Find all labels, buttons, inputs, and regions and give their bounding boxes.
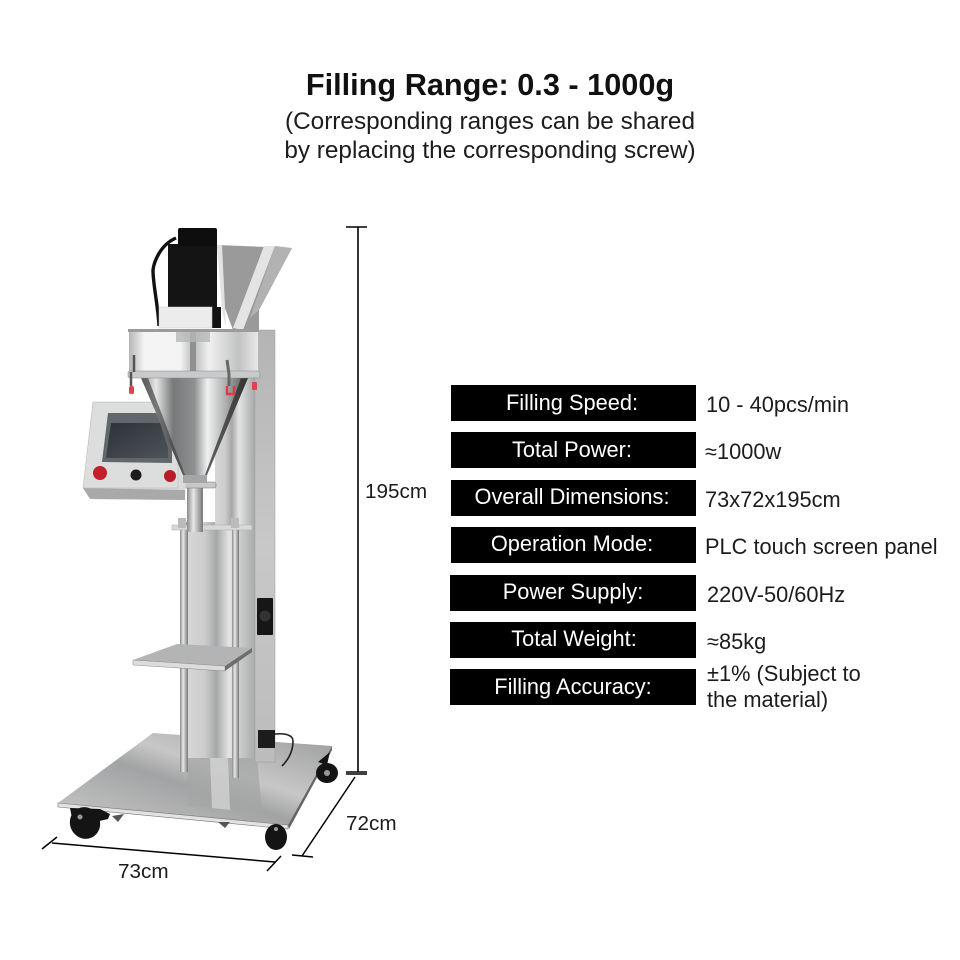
row: overall dimensions: Overall Dimensions: (474, 484, 670, 509)
subtitle: (Corresponding ranges can be shared (285, 108, 695, 135)
row: power supply: Power Supply: (503, 579, 643, 604)
row: overall dimensions: 73x72x195cm (705, 487, 841, 512)
height dimension (346, 227, 367, 774)
buttons (93, 466, 176, 482)
fan (257, 598, 273, 635)
row: power supply: 220V-50/60Hz (707, 582, 845, 607)
spec table (450, 385, 938, 712)
power plug and cable (258, 730, 293, 766)
row: total weight: ≈85kg (707, 629, 766, 654)
base plate (58, 733, 332, 829)
row: total power: ≈1000w (705, 439, 781, 464)
row: total power (451, 432, 781, 468)
discharge tube (176, 482, 216, 532)
hopper (217, 245, 292, 330)
height label: 195cm (365, 480, 427, 503)
row: filling accuracy: Filling Accuracy: (494, 674, 652, 699)
row: overall dimensions (451, 480, 841, 516)
top bracket (172, 518, 252, 530)
subtitle: by replacing the corresponding screw) (284, 137, 696, 164)
cone (141, 378, 248, 483)
control panel (83, 402, 186, 500)
side column (255, 330, 275, 762)
row: filling speed: 10 - 40pcs/min (706, 392, 849, 417)
row: operation mode: Operation Mode: (491, 531, 653, 556)
row: total weight (450, 622, 766, 658)
width dimension (42, 837, 281, 871)
row: power supply (450, 575, 845, 611)
motor mount block (159, 307, 212, 328)
row: filling accuracy: the material) (707, 687, 828, 712)
depth dimension (292, 777, 355, 857)
shelf (133, 644, 252, 671)
casters (65, 752, 338, 850)
row: filling speed: Filling Speed: (506, 390, 638, 415)
width label: 73cm (118, 860, 169, 883)
hopper cylinder (128, 329, 259, 373)
row: operation mode: PLC touch screen panel (705, 534, 938, 559)
row: filling accuracy (450, 661, 861, 712)
row: total weight: Total Weight: (511, 626, 637, 651)
row: filling speed (451, 385, 849, 421)
subtitle (284, 108, 696, 164)
motor (153, 228, 221, 328)
depth label: 72cm (346, 812, 397, 835)
flange and clamps (128, 355, 260, 394)
touch screen (102, 413, 172, 463)
middle column panel (187, 522, 257, 758)
machine illustration (58, 228, 338, 850)
row: operation mode (451, 527, 938, 563)
row: total power: Total Power: (512, 437, 632, 462)
title: Filling Range: 0.3 - 1000g (306, 67, 674, 102)
guide rods (180, 522, 239, 778)
row: filling accuracy: ±1% (Subject to (707, 661, 861, 686)
